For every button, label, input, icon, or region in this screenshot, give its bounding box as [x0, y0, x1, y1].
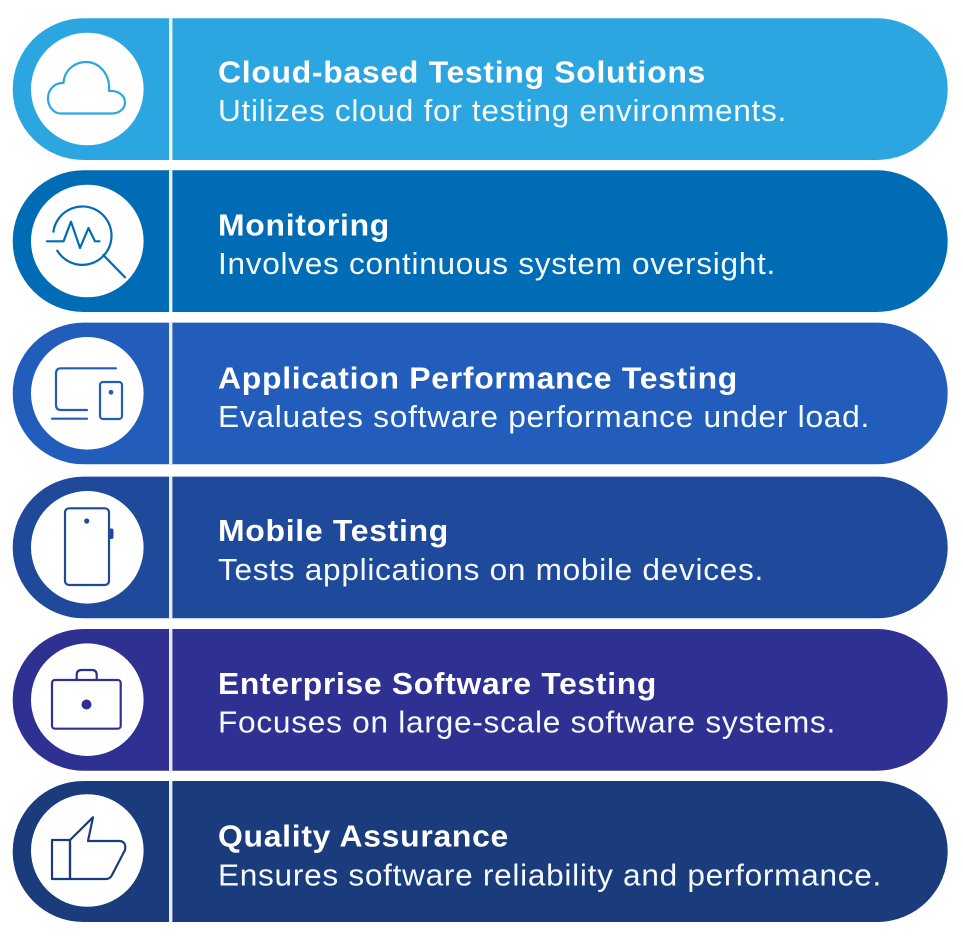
icon: thumbs up [52, 817, 125, 879]
text: application performance description: Evaluates software performance under load. [218, 399, 870, 434]
icon: mobile phone [65, 508, 114, 585]
heading: enterprise software testing: Enterprise Software Testing [218, 666, 657, 701]
icon: cloud [48, 62, 125, 114]
panel: quality assurance [13, 781, 948, 922]
panel: enterprise software testing [13, 629, 948, 771]
text: enterprise description: Focuses on large-scale software systems. [218, 704, 836, 740]
icon: magnifier with pulse [47, 206, 125, 277]
panel: application performance testing [13, 323, 948, 464]
panel: mobile testing [13, 477, 948, 618]
heading: quality assurance: Quality Assurance [218, 819, 509, 854]
text: mobile description: Tests applications on mobile devices. [218, 552, 764, 587]
heading: monitoring: Monitoring [218, 208, 390, 242]
panel: cloud-based testing solutions [13, 18, 948, 160]
heading: application performance testing: Application Performance Testing [218, 360, 738, 396]
text: monitoring description: Involves continuous system oversight. [218, 246, 776, 281]
text: quality assurance description: Ensures software reliability and performance. [218, 857, 882, 892]
heading: cloud-based testing solutions: Cloud-based Testing Solutions [218, 54, 706, 90]
panel: monitoring [13, 170, 948, 312]
icon: computer and phone [52, 368, 122, 419]
icon: briefcase [52, 670, 121, 729]
heading: mobile testing: Mobile Testing [218, 513, 449, 548]
text: cloud description: Utilizes cloud for testing environments. [218, 93, 787, 128]
